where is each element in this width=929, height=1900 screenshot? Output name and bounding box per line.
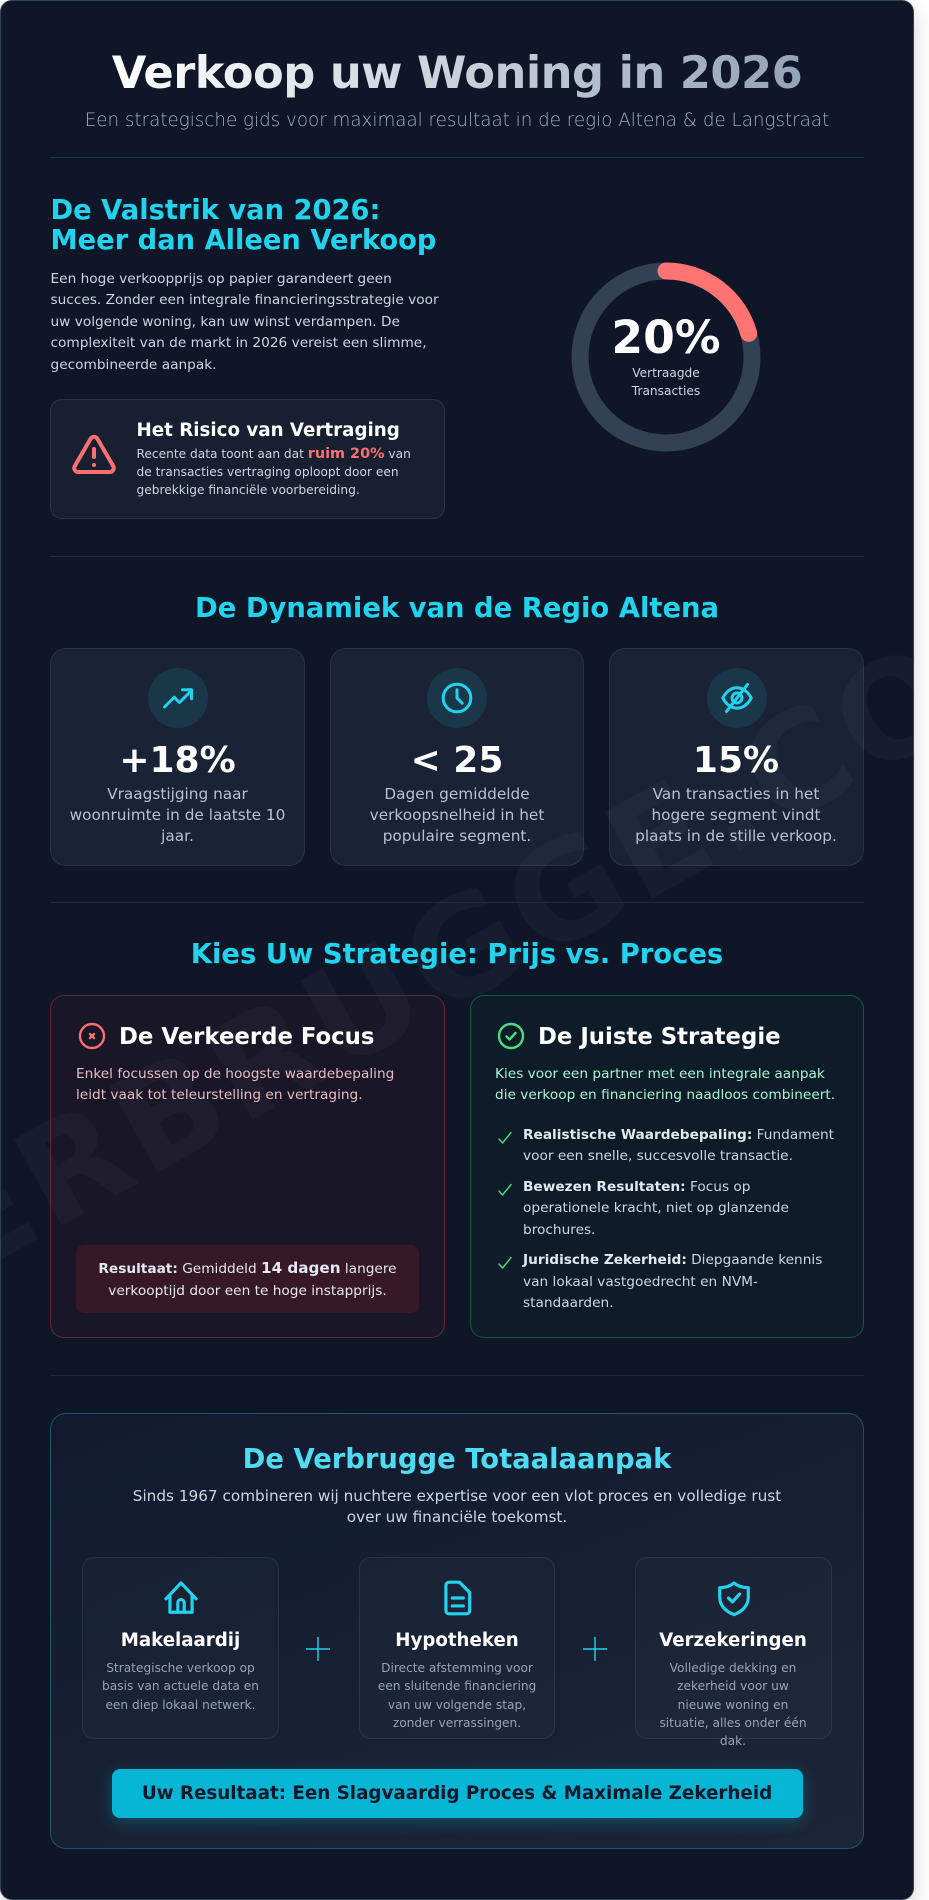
donut label: Transacties xyxy=(632,384,700,398)
panel text xyxy=(76,1066,394,1103)
item 1: Realistische Waardebepaling: Fundament xyxy=(523,1126,834,1142)
stat text: plaats in de stille verkoop. xyxy=(635,827,837,845)
service text: een diep lokaal netwerk. xyxy=(105,1698,256,1712)
icon: house xyxy=(164,1581,198,1614)
panel text: Enkel focussen op de hoogste waardebepaling xyxy=(76,1066,394,1082)
intro text xyxy=(50,270,439,372)
title: Verkoop uw Woning in 2026 xyxy=(112,46,802,99)
stat text xyxy=(635,784,837,845)
checklist xyxy=(498,1126,834,1311)
stat text: verkoopsnelheid in het xyxy=(370,806,544,824)
heading: Meer dan Alleen Verkoop xyxy=(50,225,436,256)
item 3: van lokaal vastgoedrecht en NVM- xyxy=(523,1274,758,1290)
panel intro xyxy=(133,1486,781,1526)
risk callout xyxy=(50,399,445,519)
icon: plus xyxy=(583,1637,607,1661)
intro text: uw volgende woning, kan uw winst verdampen. De xyxy=(50,314,400,330)
item 2: operationele kracht, niet op glanzende xyxy=(523,1200,789,1216)
stat value: +18% xyxy=(119,740,236,780)
stat value: < 25 xyxy=(411,740,503,780)
service text: situatie, alles onder één xyxy=(659,1716,807,1730)
intro text: complexiteit van de markt in 2026 vereist een slimme, xyxy=(50,335,427,351)
service text: Volledige dekking en xyxy=(670,1661,796,1675)
service text: een sluitende financiering xyxy=(378,1679,536,1693)
callout text: Recente data toont aan dat ruim 20% van xyxy=(136,446,411,462)
stat text: Dagen gemiddelde xyxy=(384,784,530,802)
panel: juiste strategie xyxy=(470,995,864,1338)
donut value: 20% xyxy=(611,311,721,364)
icon: x circle xyxy=(78,1022,106,1050)
callout text: gebrekkige financiële voorbereiding. xyxy=(136,483,360,497)
stat text: woonruimte in de laatste 10 xyxy=(70,806,285,824)
item 3 xyxy=(498,1252,822,1311)
donut chart xyxy=(572,262,760,452)
heading: strategie: Kies Uw Strategie: Prijs vs. Proces xyxy=(191,939,723,970)
callout text xyxy=(136,446,411,497)
stat text: Vraagstijging naar xyxy=(107,784,248,802)
panel text: Kies voor een partner met een integrale aanpak xyxy=(495,1066,825,1082)
stat value: 15% xyxy=(693,740,779,780)
panel: totaalaanpak xyxy=(50,1413,864,1849)
header xyxy=(85,46,829,131)
call to action: Uw Resultaat: Een Slagvaardig Proces & Maximale Zekerheid xyxy=(142,1783,772,1804)
icon: shield xyxy=(718,1581,750,1616)
service text: zekerheid voor uw xyxy=(677,1679,789,1693)
panel intro: over uw financiële toekomst. xyxy=(347,1508,567,1526)
service text xyxy=(102,1661,259,1712)
panel title: De Verkeerde Focus xyxy=(119,1024,374,1050)
service name: Verzekeringen xyxy=(659,1630,807,1651)
panel: verkeerde focus xyxy=(50,995,445,1338)
heading: De Valstrik van 2026: xyxy=(50,195,380,226)
donut label: Vertraagde xyxy=(632,366,700,380)
service: hypotheken xyxy=(359,1557,555,1739)
icon: plus xyxy=(306,1637,330,1661)
item 1 xyxy=(498,1126,834,1164)
stat card 3 xyxy=(608,648,864,866)
stat text: Van transacties in het xyxy=(653,784,819,802)
service name: Makelaardij xyxy=(121,1630,240,1651)
service text: basis van actuele data en xyxy=(102,1679,259,1693)
item 3: standaarden. xyxy=(523,1295,614,1311)
item 2: brochures. xyxy=(523,1222,596,1238)
service text: Strategische verkoop op xyxy=(106,1661,255,1675)
panel text: leidt vaak tot teleurstelling en vertraging. xyxy=(76,1087,363,1103)
intro text: Een hoge verkoopprijs op papier garandeert geen xyxy=(50,270,392,286)
service: verzekeringen xyxy=(634,1557,832,1739)
stat text xyxy=(70,784,285,845)
service text: Directe afstemming voor xyxy=(381,1661,533,1675)
icon: trend up xyxy=(162,688,194,709)
icon: check circle xyxy=(498,1022,524,1050)
item 2 xyxy=(498,1178,789,1238)
service text: zonder verrassingen. xyxy=(393,1716,521,1730)
icon: clock xyxy=(442,682,472,714)
result box: Resultaat: Gemiddeld 14 dagen langere xyxy=(98,1259,397,1277)
panel heading: De Verbrugge Totaalaanpak xyxy=(243,1444,671,1475)
callout text: de transacties vertraging oploopt door een xyxy=(136,465,399,479)
call to action xyxy=(112,1769,802,1818)
callout title: Het Risico van Vertraging xyxy=(136,420,400,441)
stat text: populaire segment. xyxy=(383,827,531,845)
service text: nieuwe woning en xyxy=(678,1698,788,1712)
item 3: Juridische Zekerheid: Diepgaande kennis xyxy=(523,1252,822,1268)
heading xyxy=(50,195,436,256)
service text xyxy=(378,1661,536,1730)
item 2: Bewezen Resultaten: Focus op xyxy=(523,1178,750,1194)
donut label xyxy=(632,366,700,398)
section: de valstrik xyxy=(50,195,439,372)
icon: document xyxy=(444,1580,472,1616)
service: makelaardij xyxy=(82,1557,279,1739)
panel intro: Sinds 1967 combineren wij nuchtere expertise voor een vlot proces en volledige rust xyxy=(133,1486,781,1504)
stat card 1 xyxy=(50,648,305,866)
subtitle: Een strategische gids voor maximaal resultaat in de regio Altena & de Langstraat xyxy=(85,110,829,131)
panel title: De Juiste Strategie xyxy=(538,1024,781,1050)
service text xyxy=(659,1661,807,1748)
stat card 2 xyxy=(330,648,584,866)
stat text xyxy=(370,784,544,845)
service text: dak. xyxy=(720,1734,746,1748)
heading: dynamiek: De Dynamiek van de Regio Altena xyxy=(195,593,719,624)
result box: verkooptijd door een te hoge instapprijs. xyxy=(108,1282,387,1298)
intro text: gecombineerde aanpak. xyxy=(50,356,217,372)
stat text: hogere segment vindt xyxy=(651,806,821,824)
item 1: voor een snelle, succesvolle transactie. xyxy=(523,1148,793,1164)
icon: warning triangle xyxy=(72,434,116,474)
panel text xyxy=(495,1066,835,1103)
panel text: die verkoop en financiering naadloos combineert. xyxy=(495,1087,835,1103)
intro text: succes. Zonder een integrale financieringsstrategie voor xyxy=(50,292,439,308)
service text: van uw volgende stap, xyxy=(388,1698,526,1712)
result box xyxy=(76,1245,419,1313)
service name: Hypotheken xyxy=(395,1630,519,1651)
icon: eye off xyxy=(721,682,753,714)
stat text: jaar. xyxy=(161,827,194,845)
